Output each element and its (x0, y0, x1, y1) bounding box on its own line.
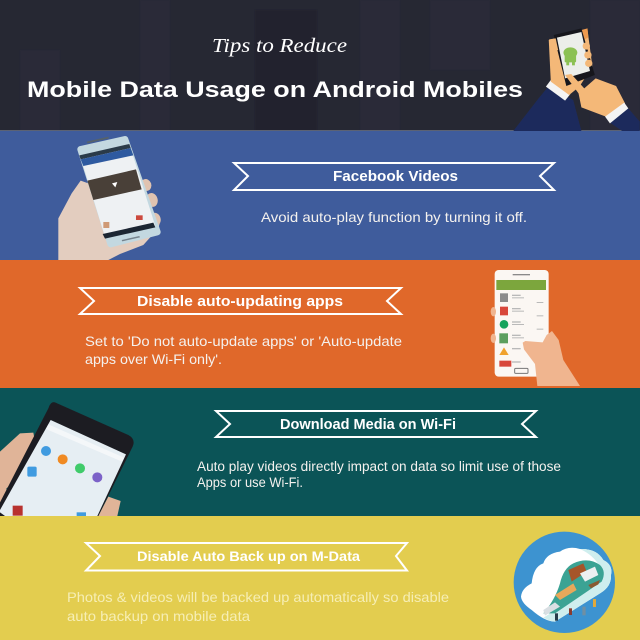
title: Mobile Data Usage on Android Mobiles (27, 77, 523, 102)
text: Facebook Videos body: Avoid auto-play function by turning it off. (261, 209, 527, 225)
icon: hand on phone with app list (491, 270, 580, 386)
text: Download Media body: Auto play videos directly impact on data so limit use of those (197, 459, 561, 474)
panel: header (0, 0, 640, 131)
icon: hands holding android phone (513, 28, 640, 131)
panel: Disable Auto Back up on M-Data (0, 516, 640, 640)
text: Auto Back up body (67, 589, 449, 624)
text: Auto Back up body: auto backup on mobile data (67, 608, 250, 624)
ribbon: Facebook Videos (234, 163, 554, 190)
text: Download Media body (197, 459, 561, 490)
heading: Facebook Videos: Facebook Videos (333, 168, 458, 185)
ribbon: Disable Auto Back up on M-Data (86, 543, 407, 570)
ribbon: Disable auto-updating apps (80, 288, 401, 314)
ribbon: Download Media on Wi-Fi (216, 411, 536, 437)
text: auto-updating body: apps over Wi-Fi only'. (85, 351, 222, 367)
subtitle: Tips to Reduce (212, 35, 347, 57)
heading: Disable Auto Back up on M-Data: Disable Auto Back up on M-Data (137, 548, 360, 564)
text: Download Media body: Apps or use Wi-Fi. (197, 475, 303, 490)
text: auto-updating body (85, 333, 402, 367)
icon: hand holding phone with apps (0, 402, 134, 516)
text: Auto Back up body: Photos & videos will be backed up automatically so disable (67, 589, 449, 605)
icon: android robot (563, 47, 577, 65)
heading: Download Media on Wi-Fi: Download Media on Wi-Fi (280, 416, 456, 433)
icon: hand holding phone with Facebook (58, 137, 162, 260)
panel: Disable auto-updating apps (0, 260, 640, 388)
icon: cloud storage (514, 532, 615, 633)
panel: Download Media on Wi-Fi (0, 388, 640, 516)
text: auto-updating body: Set to 'Do not auto-update apps' or 'Auto-update (85, 333, 402, 349)
panel: Facebook Videos (0, 131, 640, 260)
heading: Disable auto-updating apps: Disable auto-updating apps (137, 293, 343, 310)
